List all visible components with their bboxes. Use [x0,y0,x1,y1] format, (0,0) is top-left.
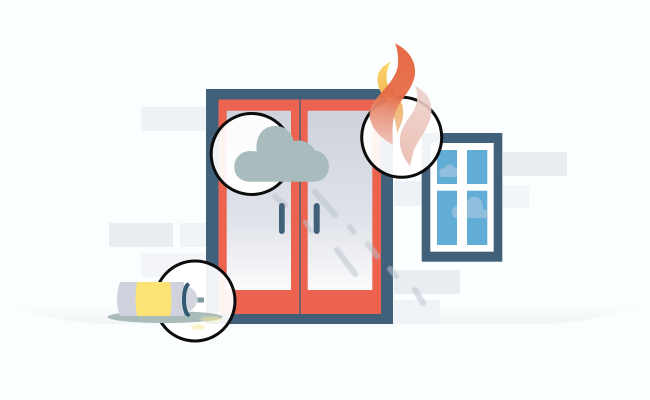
paint spill [200,316,222,322]
flame: main [370,43,415,145]
circle: cloud hazard [211,114,292,194]
door frame [206,89,393,324]
glass reflections [275,192,423,303]
glass: left [227,111,291,290]
can ring [182,282,190,317]
window panes [437,150,487,245]
can nozzle [198,298,204,302]
circle: spray can hazard [155,261,235,341]
door panel: left [218,100,299,314]
background bricks [109,107,567,324]
window frame [422,133,502,262]
door panel: right [301,100,381,314]
door [206,89,423,324]
circle: fire hazard [362,97,442,177]
icon: cloud [234,126,329,182]
window [422,133,502,262]
can dome [184,287,198,311]
window clouds [439,164,487,218]
window inner [430,143,494,252]
handle: right [314,203,320,234]
can body [117,282,184,316]
can shadow [108,311,222,323]
handle: left [279,203,285,234]
can label [136,282,172,316]
glass: right [308,111,372,290]
flame: pale [400,86,431,166]
icon: spray can [108,282,222,330]
icon: flames [370,43,431,166]
ground band [0,302,650,324]
flame: yellow [378,62,403,133]
